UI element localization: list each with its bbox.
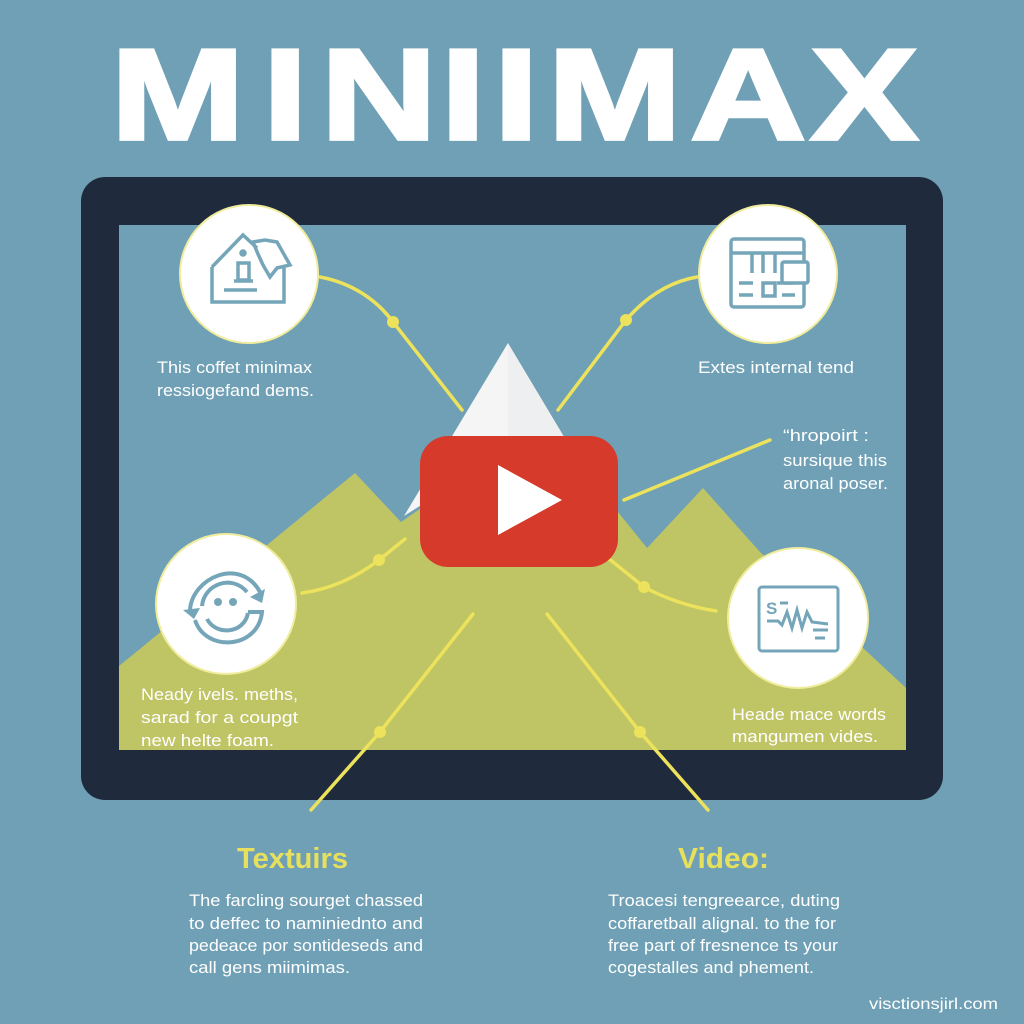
text block: Textuirs (189, 891, 423, 977)
icon: smile cycle (156, 534, 296, 674)
icon: dashboard (699, 205, 837, 343)
text block: Textuirs: The farcling sourget chassed (189, 891, 423, 910)
text: right middle: aronal poser. (783, 474, 888, 493)
footer url: visctionsjirl.com (869, 996, 998, 1013)
text block: Video: free part of fresnence ts your (608, 936, 838, 955)
connector lines (302, 277, 770, 810)
heading: Video: Video: (678, 843, 769, 875)
text: lower left: sarad for a coupgt (141, 708, 298, 727)
heading: Textuirs: Textuirs (237, 843, 348, 875)
text: right middle (783, 426, 888, 493)
text: lower right: Heade mace words (732, 705, 886, 724)
icon: house (180, 205, 318, 343)
text: lower left (141, 685, 298, 750)
icon: signal screen (728, 548, 868, 688)
panel: monitor frame (81, 177, 943, 800)
text block: Video: cogestalles and phement. (608, 958, 814, 977)
text: top left: ressiogefand dems. (157, 381, 314, 400)
text: right middle: sursique this (783, 451, 887, 470)
text: lower left: new helte foam. (141, 731, 274, 750)
text block: Textuirs: pedeace por sontideseds and (189, 936, 423, 955)
text: lower right: mangumen vides. (732, 727, 878, 746)
title: MINIIMAX (111, 22, 918, 167)
text block: Video: coffaretball alignal. to the for (608, 914, 836, 933)
play button (420, 436, 618, 567)
text: top left: This coffet minimax (157, 358, 313, 377)
text block: Video: Troacesi tengreearce, duting (608, 891, 840, 910)
text: right middle: “hropoirt : (783, 426, 869, 445)
text block: Video (608, 891, 840, 977)
text: lower right (732, 705, 886, 746)
text: lower left: Neady ivels. meths, (141, 685, 298, 704)
mountains (119, 473, 906, 750)
text: top right: Extes internal tend (698, 358, 854, 377)
text: top left (157, 358, 314, 400)
white peak (404, 343, 600, 516)
icon: signal screen: S (766, 599, 777, 618)
text block: Textuirs: call gens miimimas. (189, 958, 350, 977)
text block: Textuirs: to deffec to naminiednto and (189, 914, 423, 933)
